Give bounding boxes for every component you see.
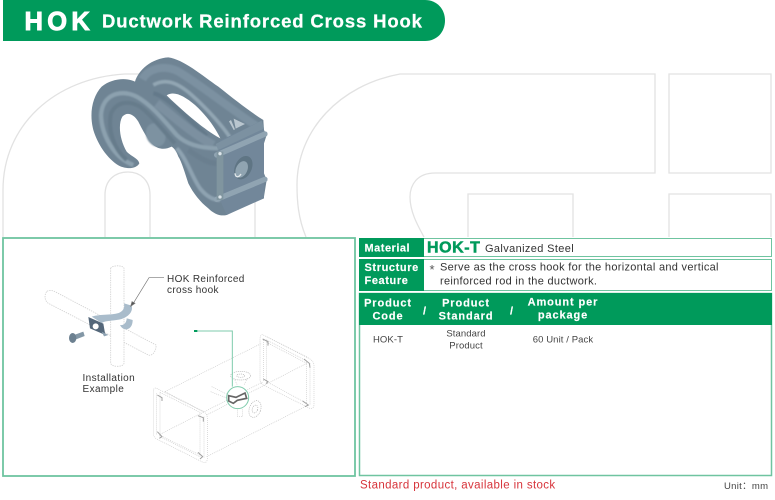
- title banner: [3, 0, 445, 41]
- disc behind hook: [142, 120, 169, 150]
- panel: installation example: [3, 238, 355, 476]
- structure feature row: *: [430, 262, 435, 277]
- product table: /: [510, 306, 514, 318]
- installation example label: Installation: [82, 373, 135, 384]
- product table: Code: [372, 310, 404, 322]
- installation detail drawing: [45, 266, 314, 463]
- material row: Material: [364, 242, 410, 254]
- background watermark outlines: [3, 74, 771, 237]
- table data: Standard: [446, 328, 486, 340]
- hook silhouette: [91, 57, 267, 215]
- panel: specification: [359, 238, 772, 476]
- duct frame wireframe: [153, 335, 314, 463]
- hook slot opening: [167, 93, 220, 138]
- table data: HOK-T: [373, 334, 403, 346]
- product table: Product: [442, 298, 490, 310]
- bolt hole: [231, 153, 256, 182]
- structure feature row: Feature: [364, 275, 408, 287]
- washer and discs: [231, 371, 251, 380]
- structure feature row: Serve as the cross hook for the horizontal and vertical: [440, 262, 719, 274]
- product table: Product: [364, 298, 412, 310]
- stock note: Standard product, available in stock: [360, 480, 556, 492]
- rear frame: [260, 335, 314, 409]
- unit note: Unit：mm: [724, 481, 768, 492]
- table data: Product: [449, 340, 483, 352]
- material row: HOK-T: [427, 240, 480, 256]
- table data: [373, 328, 593, 352]
- product table: package: [538, 310, 588, 322]
- front hook ridge: [101, 93, 218, 165]
- product table: Amount per: [528, 296, 598, 308]
- callout label: cross hook: [167, 285, 220, 296]
- rear hook upper ridge: [142, 68, 258, 127]
- structure feature row: [359, 259, 772, 291]
- front clamp body: [216, 121, 265, 215]
- structure feature row: Structure: [364, 262, 419, 274]
- title text: Ductwork Reinforced Cross Hook: [102, 10, 423, 31]
- title code: HOK: [24, 8, 94, 36]
- material row: Galvanized Steel: [485, 243, 574, 255]
- leader circle and connector: [194, 330, 249, 409]
- callout label: HOK Reinforced: [167, 274, 245, 285]
- installation example label: Example: [82, 384, 124, 395]
- product table: Standard: [439, 310, 493, 322]
- callout pointer: [131, 278, 164, 306]
- structure feature row: reinforced rod in the ductwork.: [440, 276, 597, 288]
- table header: [359, 293, 772, 325]
- material row: [359, 238, 772, 257]
- table data: 60 Unit / Pack: [533, 334, 593, 346]
- front frame: [153, 388, 207, 463]
- product table: /: [423, 306, 427, 318]
- connecting lines: [160, 343, 307, 457]
- rods: [45, 266, 156, 366]
- product image: cross hook: [91, 57, 267, 215]
- hook: [88, 303, 133, 336]
- bolt: [69, 332, 85, 343]
- corner brackets: [157, 339, 310, 459]
- product table: [359, 293, 772, 476]
